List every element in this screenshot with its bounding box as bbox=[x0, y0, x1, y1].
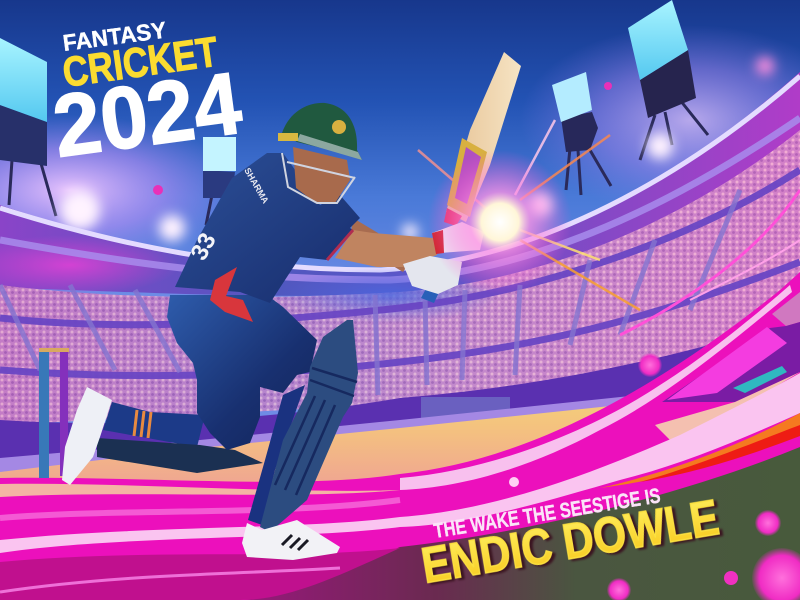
roof rim highlight bbox=[0, 76, 800, 270]
light magenta stroke bbox=[0, 500, 400, 518]
rear forearm bbox=[350, 218, 410, 272]
orange band bbox=[600, 413, 800, 488]
red band bbox=[640, 425, 800, 482]
rear shoe bbox=[62, 387, 112, 485]
lens glows bbox=[60, 57, 774, 241]
helmet brim bbox=[297, 134, 362, 160]
sky glow left bbox=[0, 115, 240, 265]
impact flash bbox=[428, 150, 572, 294]
helmet clip bbox=[278, 133, 298, 141]
title bbox=[47, 17, 247, 176]
bat flash rays bbox=[418, 120, 640, 310]
title line: 2024: 2024 bbox=[47, 53, 247, 176]
front sock bbox=[248, 385, 305, 525]
dark purple concourse band bbox=[0, 318, 800, 470]
front leg pad bbox=[260, 320, 358, 532]
rear sock bbox=[103, 402, 205, 447]
title line: cricket: CRICKET bbox=[60, 28, 221, 96]
shoe stripes bbox=[282, 535, 308, 550]
peach band left bbox=[0, 484, 400, 497]
stand pillars bbox=[0, 190, 740, 395]
pale pink band bbox=[0, 373, 800, 553]
pale boundary board bbox=[0, 395, 640, 472]
helmet bbox=[282, 103, 362, 160]
stadium roof bbox=[0, 72, 800, 296]
front shoe bbox=[242, 520, 340, 560]
floodlight: far left bbox=[0, 38, 56, 216]
right light streaks bbox=[620, 190, 800, 335]
back name on jersey: SHARMA bbox=[242, 166, 271, 206]
helmet grill bbox=[282, 153, 355, 203]
outfield bbox=[0, 360, 800, 600]
tagline small: THE WAKE THE SEESTIGE IS bbox=[432, 484, 662, 543]
wicket stumps bbox=[39, 348, 69, 478]
deep magenta lower band bbox=[0, 548, 400, 600]
gloves bbox=[403, 222, 484, 294]
floodlight: centre right bbox=[552, 72, 611, 195]
main magenta swoosh bbox=[0, 272, 800, 600]
teal accent bbox=[733, 366, 787, 393]
jersey torso bbox=[175, 153, 360, 303]
magenta bar bbox=[667, 327, 787, 400]
magenta glow under roof bbox=[0, 235, 180, 295]
roof lower lip bbox=[0, 118, 800, 280]
title line: fantasy: FANTASY bbox=[61, 17, 168, 56]
front arm bbox=[335, 230, 437, 267]
helmet badge bbox=[332, 120, 346, 134]
back number on jersey: 33 bbox=[185, 229, 222, 265]
jersey red flash bbox=[210, 267, 253, 322]
cream wedge bbox=[655, 372, 800, 440]
dark green ground bbox=[240, 440, 800, 600]
pad ridges bbox=[275, 368, 357, 495]
cricket batsman bbox=[62, 52, 521, 560]
bat bbox=[421, 52, 521, 303]
tagline bbox=[418, 484, 723, 594]
face bbox=[293, 147, 350, 203]
blue haze over centre stand bbox=[280, 267, 500, 323]
purple patch upper right bbox=[662, 322, 800, 402]
crowd visible upper right bbox=[772, 292, 800, 326]
sky glow right bbox=[520, 25, 800, 215]
stand tier bands bbox=[0, 170, 800, 376]
tagline large: ENDIC DOWLE bbox=[418, 489, 723, 594]
floating pink orbs bbox=[153, 82, 800, 600]
stands with crowd bbox=[0, 130, 800, 422]
thin pale streak bbox=[400, 285, 792, 490]
lower pale lines bbox=[0, 568, 340, 592]
rear shin pad bbox=[97, 438, 263, 473]
sponsor board bbox=[421, 397, 510, 423]
floodlight: centre left bbox=[203, 137, 236, 225]
trousers bbox=[167, 295, 317, 450]
floodlight: far right bbox=[628, 0, 708, 160]
sleeve trim bbox=[327, 230, 353, 260]
sock stripes bbox=[134, 410, 151, 438]
